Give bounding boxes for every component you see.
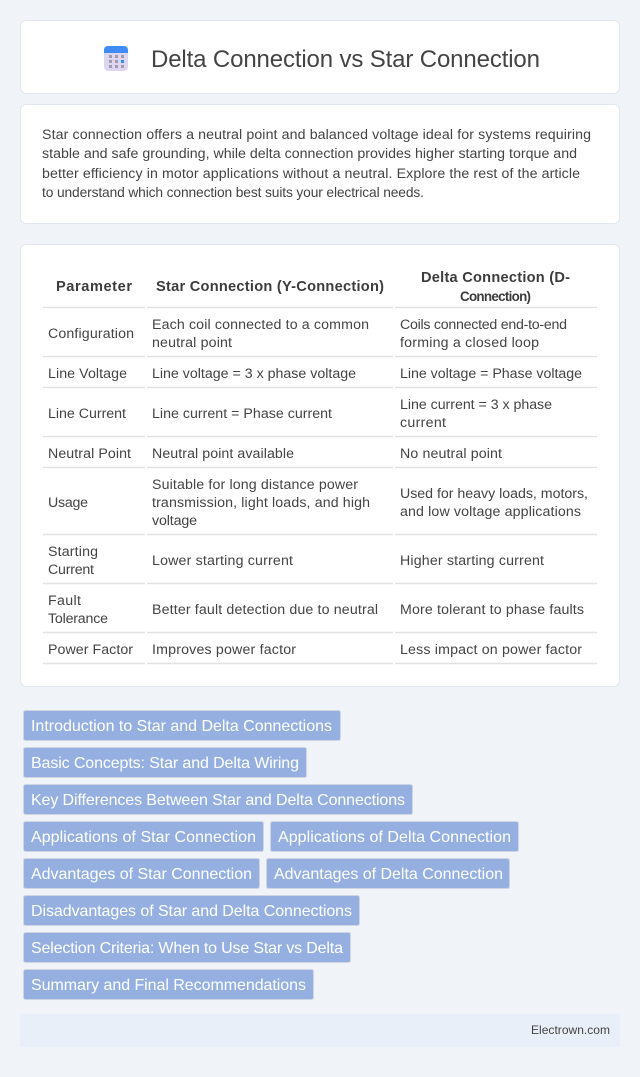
row: line voltage: Line Voltage	[48, 366, 127, 382]
row: neutral point: Neutral point available	[152, 446, 294, 462]
tag: introduction	[24, 710, 340, 740]
row: usage	[48, 477, 588, 529]
intro text: stable and safe grounding, while delta connection provides higher starting torque and	[42, 146, 577, 162]
row: neutral point: Neutral Point	[48, 446, 131, 462]
tag: applications of star: Applications of Star Connection	[31, 829, 256, 846]
row: power factor: Power Factor	[48, 642, 133, 658]
row: starting current: Current	[48, 562, 94, 578]
intro text: to understand which connection best suits your electrical needs.	[42, 185, 424, 200]
row: starting current: Lower starting current	[152, 553, 293, 569]
row: configuration: Coils connected end-to-end	[400, 317, 567, 333]
tag: summary	[24, 970, 314, 1000]
tag: summary: Summary and Final Recommendations	[31, 977, 306, 994]
row: line current: Line Current	[48, 406, 126, 422]
row: neutral point	[48, 446, 502, 462]
row: line voltage: Line voltage = 3 x phase voltage	[152, 366, 356, 382]
row: fault tolerance: Better fault detection due to neutral	[152, 602, 378, 618]
tag: disadvantages	[24, 896, 360, 926]
tag: advantages of delta	[266, 858, 510, 888]
table header: Connection)	[460, 289, 531, 304]
intro text	[42, 127, 591, 200]
row: configuration: Each coil connected to a common	[152, 317, 369, 333]
row: power factor: Less impact on power factor	[400, 642, 582, 658]
tag: applications of delta: Applications of Delta Connection	[278, 829, 511, 846]
table header: Delta Connection (D-	[421, 270, 570, 286]
row: starting current: Higher starting current	[400, 553, 544, 569]
row: usage: Used for heavy loads, motors,	[400, 486, 588, 502]
row: usage: transmission, light loads, and high	[152, 495, 370, 511]
tag: applications of delta	[270, 822, 518, 852]
tag: selection criteria	[24, 932, 350, 962]
row: fault tolerance: Fault	[48, 593, 81, 609]
topic tags	[24, 710, 518, 1000]
row: starting current: Starting	[48, 544, 98, 560]
row: line current: Line current = Phase current	[152, 406, 332, 422]
row: usage: Suitable for long distance power	[152, 477, 358, 493]
row: configuration: forming a closed loop	[400, 335, 539, 351]
tag: applications of star	[24, 822, 264, 852]
footer credit: Electrown.com	[531, 1023, 610, 1037]
row: configuration: neutral point	[152, 335, 232, 351]
tag: advantages of star: Advantages of Star Connection	[31, 866, 252, 883]
tag: key differences: Key Differences Between Star and Delta Connections	[31, 792, 405, 809]
tag: advantages of delta: Advantages of Delta Connection	[274, 866, 503, 883]
tag: basic concepts	[24, 748, 306, 778]
row: starting current	[48, 544, 544, 578]
intro text: better efficiency in motor applications without a neutral. Explore the rest of the article	[42, 166, 580, 182]
icon: calendar	[104, 46, 128, 71]
row: line voltage: Line voltage = Phase voltage	[400, 366, 582, 382]
row: usage: voltage	[152, 513, 197, 529]
row: line current	[48, 397, 552, 431]
row: configuration	[48, 317, 567, 351]
row: power factor	[48, 642, 582, 658]
table header: Star Connection (Y-Connection)	[156, 279, 384, 295]
table header: Parameter	[56, 279, 132, 295]
footer	[20, 1014, 620, 1047]
row: neutral point: No neutral point	[400, 446, 502, 462]
intro text: Star connection offers a neutral point and balanced voltage ideal for systems requiring	[42, 127, 591, 143]
row: usage: Usage	[48, 495, 88, 511]
tag: disadvantages: Disadvantages of Star and Delta Connections	[31, 903, 352, 920]
panel: comparison table	[20, 244, 620, 686]
row: line current: Line current = 3 x phase	[400, 397, 552, 413]
row: usage: and low voltage applications	[400, 504, 581, 520]
row: fault tolerance: Tolerance	[48, 611, 108, 627]
header panel	[20, 20, 620, 94]
row: fault tolerance	[48, 593, 584, 627]
tag: selection criteria: Selection Criteria: When to Use Star vs Delta	[31, 940, 343, 957]
panel: introduction	[20, 104, 620, 224]
row: fault tolerance: More tolerant to phase faults	[400, 602, 584, 618]
row: line voltage	[48, 366, 582, 382]
tag: introduction: Introduction to Star and Delta Connections	[31, 718, 332, 735]
table header	[56, 270, 570, 304]
row: power factor: Improves power factor	[152, 642, 296, 658]
tag: key differences	[24, 784, 412, 814]
row: line current: current	[400, 415, 446, 431]
tag: basic concepts: Basic Concepts: Star and Delta Wiring	[31, 755, 299, 772]
tag: advantages of star	[24, 858, 260, 888]
title: Delta Connection vs Star Connection	[151, 46, 540, 73]
row: configuration: Configuration	[48, 326, 134, 342]
